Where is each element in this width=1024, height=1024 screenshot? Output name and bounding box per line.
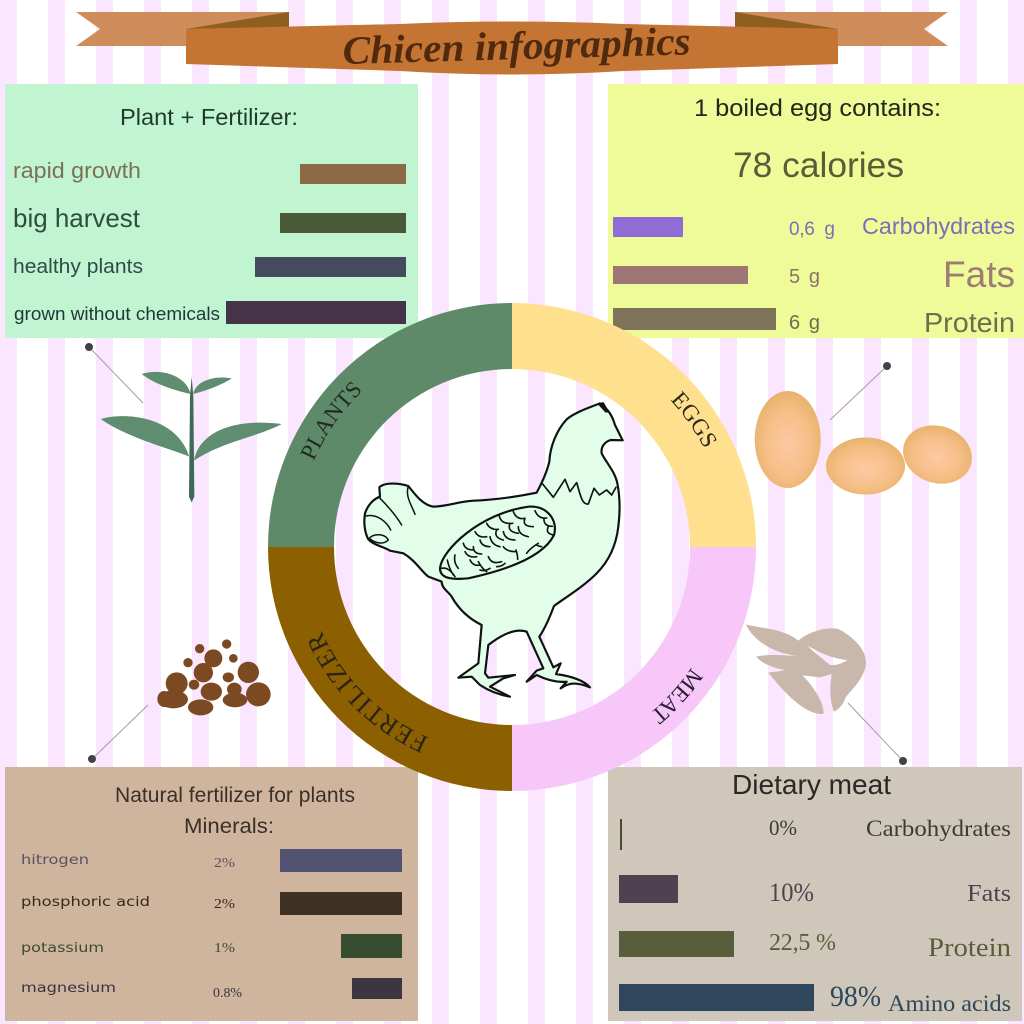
bar: fats (619, 875, 678, 903)
bar: phosphoric acid (280, 892, 402, 915)
chicken body outline (364, 403, 623, 697)
value: fats: 5 g (789, 266, 820, 288)
bar: protein (613, 308, 776, 330)
bar: protein (619, 931, 734, 957)
wing scallops (442, 511, 553, 577)
pin line: eggs (830, 362, 891, 420)
title: Chicen infographics (342, 18, 691, 73)
stem (189, 377, 194, 502)
label: big harvest: big harvest (13, 203, 141, 233)
bar: potassium (341, 934, 402, 958)
ring label: fertilizer: FERTILIZER (309, 631, 428, 753)
ribbon right tail (735, 12, 948, 46)
pin line: fertilizer (88, 705, 148, 763)
ring diagram (268, 303, 756, 791)
label: phosphoric acid: phosphoric acid (21, 895, 150, 910)
neck feathers (543, 479, 616, 504)
leaf upper left (142, 372, 191, 394)
ring label: meat: MEAT (652, 668, 704, 725)
segment: fertilizer (268, 547, 512, 791)
leaf upper right (193, 377, 232, 394)
icon: chicken (364, 403, 623, 697)
value: magnesium: 0.8% (213, 985, 242, 1000)
heading: Plant + Fertilizer: (120, 104, 298, 130)
comb (598, 403, 609, 412)
leaf lower left (101, 416, 189, 457)
panel: boiled egg (608, 84, 1024, 338)
label: carbohydrates: Carbohydrates (862, 213, 1015, 239)
value: fats: 10% (769, 878, 814, 907)
icon: eggs (755, 391, 980, 494)
label: potassium: potassium (21, 941, 104, 956)
segment: plants (268, 303, 512, 547)
bar: hitrogen (280, 849, 402, 872)
calories: 78 calories (733, 146, 904, 185)
segment: eggs (512, 303, 756, 547)
bar: fats (613, 266, 748, 284)
value: protein: 6 g (789, 312, 820, 334)
ribbon right fold (735, 12, 838, 29)
panel: dietary meat (608, 767, 1022, 1021)
ring label: eggs: EGGS (670, 390, 716, 446)
ribbon left tail (76, 12, 289, 46)
heading: 1 boiled egg contains: (694, 95, 941, 122)
value: phosphoric acid: 2% (214, 896, 235, 911)
ribbon main band (186, 22, 838, 74)
label: fats: Fats (967, 881, 1011, 907)
pin line: plant (85, 343, 143, 403)
leaf lower right (194, 423, 282, 461)
panel: fertilizer minerals (5, 767, 418, 1021)
value: amino acids: 98% (830, 980, 881, 1013)
value: potassium: 1% (214, 940, 235, 955)
wing (440, 507, 555, 579)
value: carbohydrates: 0% (769, 815, 797, 840)
heading: Natural fertilizer for plants (115, 784, 355, 807)
title ribbon (76, 12, 948, 74)
label: fats: Fats (943, 254, 1015, 295)
value: hitrogen: 2% (214, 855, 235, 870)
bar: magnesium (352, 978, 402, 999)
label: healthy plants: healthy plants (13, 255, 143, 278)
egg middle (826, 438, 905, 494)
label: grown without chemicals: grown without chemicals (14, 303, 220, 324)
tail feathers (366, 486, 415, 543)
icon: plant (101, 372, 282, 502)
bar: carbohydrates (620, 819, 622, 850)
panel: plant + fertilizer (5, 84, 418, 338)
bar: healthy plants (255, 257, 406, 277)
label: hitrogen: hitrogen (21, 853, 89, 868)
bar: big harvest (280, 213, 406, 233)
label: amino acids: Amino acids (888, 991, 1011, 1016)
label: carbohydrates: Carbohydrates (866, 816, 1011, 841)
bar: grown without chemicals (226, 301, 406, 324)
value: carbohydrates: 0,6 g (789, 219, 835, 240)
bar: carbohydrates (613, 217, 683, 237)
label: protein: Protein (924, 307, 1015, 338)
heading: Dietary meat (732, 769, 891, 800)
label: rapid growth: rapid growth (13, 158, 141, 183)
bar: rapid growth (300, 164, 406, 184)
ribbon left fold (186, 12, 289, 29)
ring label: plants: PLANTS (300, 382, 360, 460)
egg right (895, 417, 980, 492)
icon: meat (746, 624, 866, 714)
subheading: Minerals: (184, 815, 274, 838)
label: protein: Protein (928, 933, 1011, 962)
value: protein: 22,5 % (769, 930, 836, 956)
bar: amino acids (619, 984, 814, 1011)
segment: meat (512, 547, 756, 791)
label: magnesium: magnesium (21, 981, 116, 996)
egg left (755, 391, 821, 488)
icon: fertilizer granules (157, 639, 271, 715)
pin line: meat (848, 703, 907, 765)
